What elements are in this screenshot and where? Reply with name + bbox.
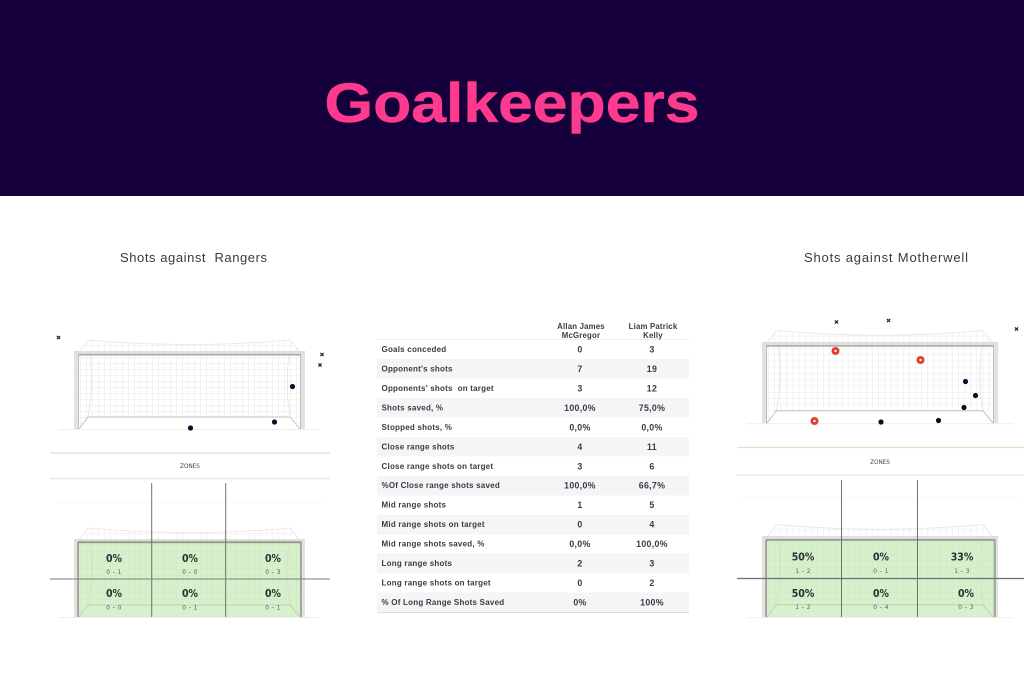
zone values: 1 – 2 (795, 567, 811, 575)
panel: Motherwell zones label: ZONES (870, 459, 890, 466)
table rows: 12 (647, 384, 657, 394)
zone values: 0 – 4 (873, 603, 889, 611)
table rows (382, 344, 668, 608)
panel: Motherwell zones chart (737, 480, 1024, 618)
table rows: Mid range shots saved, % (382, 540, 485, 548)
table: goalkeeper comparison (377, 322, 689, 612)
heading: shots against Motherwell: Shots against Motherwell (804, 250, 968, 265)
zone values: 1 – 3 (954, 567, 970, 575)
zone values: 0% (106, 588, 123, 600)
table rows: 11 (647, 442, 657, 452)
table header: Liam Patrick (629, 322, 678, 331)
table rows: Close range shots (382, 442, 455, 452)
zone values: 0% (873, 588, 890, 600)
table rows: 100,0% (564, 480, 596, 490)
zone values: 0% (182, 553, 199, 565)
table header: Kelly (643, 331, 663, 340)
panel: Rangers zones label: ZONES (180, 463, 200, 470)
table rows: 75,0% (639, 403, 665, 413)
panel: Rangers shot map (57, 336, 324, 431)
table rows: 3 (577, 462, 583, 472)
saved shots (878, 379, 978, 425)
table rows: 6 (649, 462, 655, 472)
zone values: 0 – 3 (265, 568, 281, 576)
zone values: 33% (951, 552, 974, 564)
table rows: Close range shots on target (382, 462, 493, 471)
table rows: 3 (649, 558, 655, 568)
header banner (0, 0, 1024, 196)
table rows: Opponent's shots (382, 364, 453, 374)
table rows: 2 (577, 558, 583, 568)
zone values: 0 – 1 (873, 567, 889, 575)
table rows: %Of Close range shots saved (382, 481, 500, 490)
table rows: 66,7% (639, 480, 665, 490)
table rows: 0,0% (641, 422, 663, 432)
table header: Allan James (557, 322, 605, 331)
zone values: 50% (792, 552, 815, 564)
table rows: 0,0% (569, 539, 591, 549)
table rows: 0% (573, 598, 587, 608)
zone values: 0 – 0 (182, 568, 198, 576)
zone values: 0% (265, 588, 282, 600)
table rows: 2 (649, 578, 655, 588)
table rows: 0 (577, 344, 583, 354)
table rows: 4 (649, 520, 655, 530)
table rows: 3 (649, 344, 655, 354)
zone values: 0% (106, 553, 123, 565)
table rows: 100,0% (564, 403, 596, 413)
missed shots (835, 319, 1018, 331)
table rows: Mid range shots on target (382, 520, 485, 529)
table header: McGregor (562, 331, 600, 340)
table rows: Shots saved, % (382, 404, 443, 412)
zone values: 0 – 0 (106, 604, 122, 612)
table rows: 5 (649, 500, 655, 510)
table rows: 4 (577, 442, 583, 452)
table header (557, 322, 678, 340)
table rows: % Of Long Range Shots Saved (382, 598, 504, 607)
table rows: 0 (577, 578, 583, 588)
zone values: 0 – 1 (106, 568, 122, 576)
zone values: 0% (265, 553, 282, 565)
table rows: 100,0% (636, 539, 668, 549)
missed shots (57, 336, 324, 367)
table rows: 0 (577, 520, 583, 530)
zone values: 0 – 3 (958, 603, 974, 611)
table rows: 1 (577, 500, 583, 510)
zone values: 0% (873, 552, 890, 564)
zone values: 0% (958, 588, 975, 600)
table rows: 3 (577, 384, 583, 394)
zone values: 1 – 2 (795, 603, 811, 611)
table rows: 19 (647, 364, 657, 374)
table rows: Goals conceded (382, 345, 446, 354)
panel: Motherwell shot map (747, 319, 1018, 425)
saved shots (188, 384, 295, 431)
table rows: 100% (640, 598, 664, 608)
goals conceded (810, 347, 924, 425)
heading: shots against Rangers: Shots against Rangers (120, 250, 268, 265)
table rows: Opponents' shots on target (382, 384, 494, 393)
panel: Rangers zones chart (50, 483, 330, 618)
table rows: Stopped shots, % (382, 423, 452, 432)
table rows: 7 (577, 364, 583, 374)
table rows: Long range shots (382, 559, 452, 568)
table rows: 0,0% (569, 422, 591, 432)
table rows: Mid range shots (382, 500, 446, 510)
zone values: 0 – 1 (265, 604, 281, 612)
zone values (106, 553, 282, 612)
zone values: 50% (792, 588, 815, 600)
zone values: 0% (182, 588, 199, 600)
zone values: 0 – 1 (182, 604, 198, 612)
table rows: Long range shots on target (382, 578, 491, 588)
title: Goalkeepers (324, 71, 700, 134)
zone values (792, 552, 975, 611)
